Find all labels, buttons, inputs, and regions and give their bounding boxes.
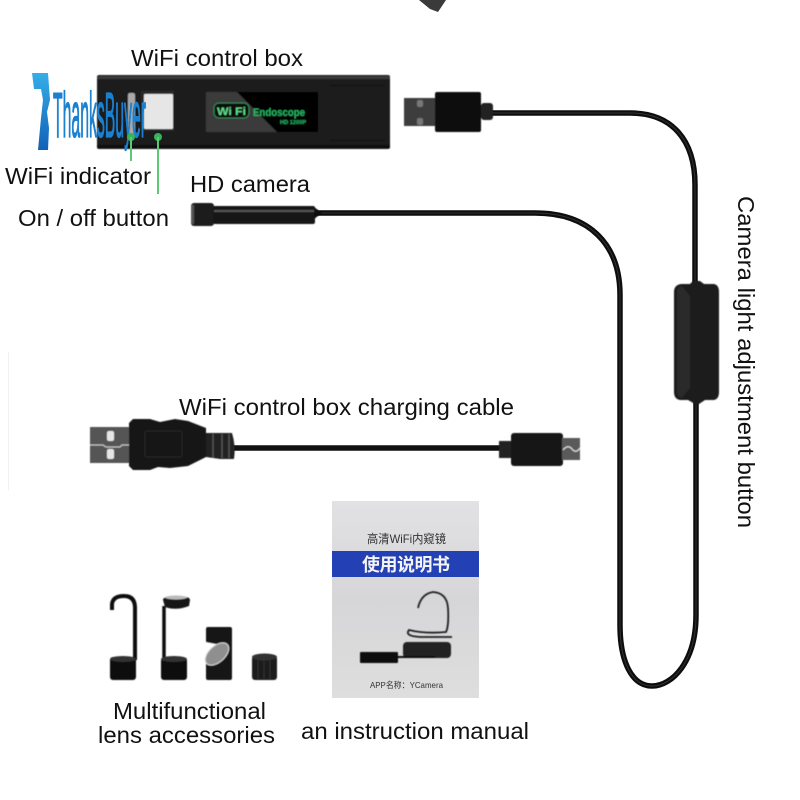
WiFi control box — [97, 75, 390, 149]
label: On / off button: On / off button — [18, 205, 169, 231]
green pointer: WiFi indicator — [127, 133, 135, 161]
logo mark — [32, 73, 50, 150]
screen label: Endoscope — [253, 107, 305, 119]
text: ThanksBuyer — [53, 79, 146, 151]
lens accessories — [110, 596, 277, 680]
label: charging cable: WiFi control box charging cable — [179, 394, 514, 420]
watermark logo — [32, 73, 146, 151]
USB cable to light adjuster — [490, 113, 695, 290]
on/off button — [141, 91, 174, 131]
label: lens accessories: Multifunctional — [113, 698, 266, 724]
USB-A plug — [90, 419, 235, 470]
micro USB plug — [499, 433, 580, 466]
screen label: Wi Fi — [217, 106, 246, 118]
cable — [232, 445, 512, 451]
manual product photo — [360, 592, 452, 663]
screen label: HD 1200P — [280, 120, 307, 126]
charging cable — [90, 419, 580, 470]
top edge fragment — [419, 0, 446, 12]
manual subtitle: 高清WiFi内窥镜 — [367, 531, 446, 546]
WiFi indicator light — [128, 93, 135, 135]
screen label — [206, 92, 318, 132]
label: HD camera: HD camera — [190, 171, 310, 197]
label: WiFi indicator: WiFi indicator — [5, 163, 151, 189]
label: camera light adjustment button: Camera light adjustment button — [733, 196, 759, 528]
hook accessory — [110, 596, 136, 680]
long camera cable — [312, 213, 696, 686]
instruction manual — [332, 501, 479, 698]
side-view accessory — [201, 627, 233, 680]
green pointer: on/off button — [154, 133, 162, 194]
label: lens accessories: lens accessories — [98, 722, 275, 748]
mirror accessory — [161, 596, 190, 680]
manual app name: APP名称：YCamera — [370, 680, 443, 690]
collar accessory — [252, 654, 277, 680]
label: instruction manual: an instruction manual — [301, 718, 529, 744]
label: WiFi control box: WiFi control box — [131, 45, 304, 71]
USB plug of control cable — [404, 92, 493, 132]
HD camera head — [191, 203, 322, 226]
manual blue banner: 使用说明书 — [362, 555, 450, 575]
manual blue banner — [332, 551, 479, 577]
light adjustment switch — [674, 281, 719, 404]
